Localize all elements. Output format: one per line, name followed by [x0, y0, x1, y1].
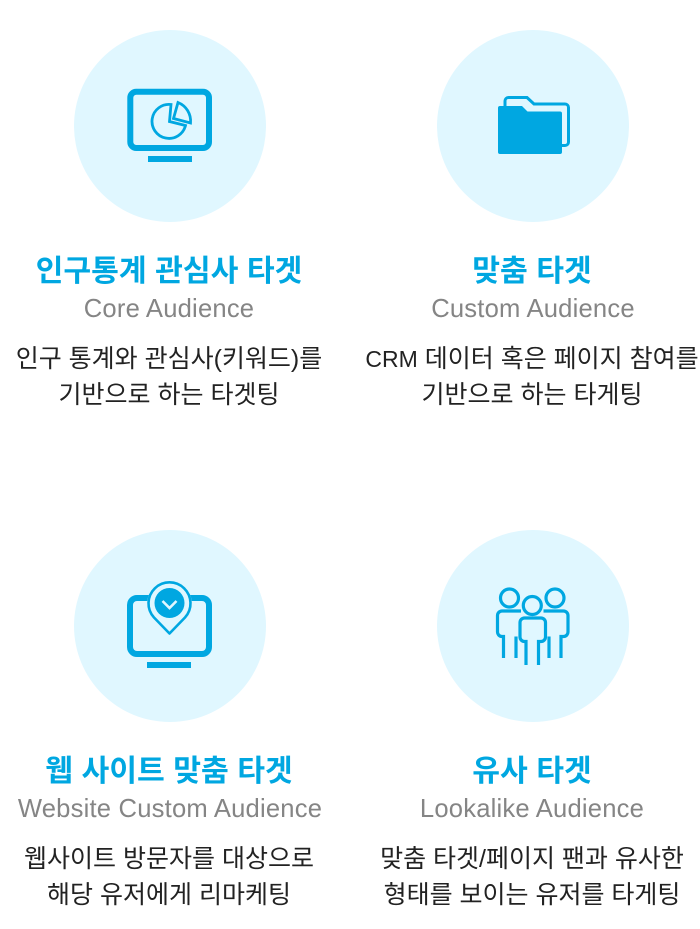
description: lookalike audience [380, 845, 684, 908]
description: website custom audience: 웹사이트 방문자를 대상으로 [24, 845, 314, 873]
icon circle: website custom audience [74, 530, 266, 722]
heading: custom audience: 맞춤 타겟 [472, 246, 592, 290]
subtitle: custom audience: Custom Audience [431, 295, 635, 323]
icon circle: custom audience [437, 30, 629, 222]
description: core audience [16, 345, 322, 408]
icon circle: lookalike audience [437, 530, 629, 722]
description: website custom audience [24, 845, 314, 908]
description: core audience: 기반으로 하는 타겟팅 [59, 380, 279, 408]
subtitle: website custom audience: Website Custom Audience [18, 795, 322, 823]
heading: core audience: 인구통계 관심사 타겟 [36, 246, 302, 290]
description: lookalike audience: 형태를 보이는 유저를 타게팅 [384, 880, 680, 908]
heading: lookalike audience: 유사 타겟 [472, 746, 592, 790]
icon: folder [498, 98, 568, 154]
description: core audience: 인구 통계와 관심사(키워드)를 [16, 345, 322, 373]
icon: three people [498, 589, 568, 665]
description: website custom audience: 해당 유저에게 리마케팅 [47, 880, 291, 908]
description: lookalike audience: 맞춤 타겟/페이지 팬과 유사한 [380, 845, 684, 873]
subtitle: lookalike audience: Lookalike Audience [420, 795, 644, 823]
heading: website custom audience: 웹 사이트 맞춤 타겟 [45, 746, 293, 790]
icon: monitor with location pin [130, 581, 209, 665]
icon: monitor with pie chart [130, 92, 209, 159]
subtitle: core audience: Core Audience [84, 295, 254, 323]
description: custom audience: CRM 데이터 혹은 페이지 참여를 [365, 345, 699, 373]
icon circle: core audience [74, 30, 266, 222]
description: custom audience [365, 345, 699, 408]
description: custom audience: 기반으로 하는 타게팅 [422, 380, 642, 408]
